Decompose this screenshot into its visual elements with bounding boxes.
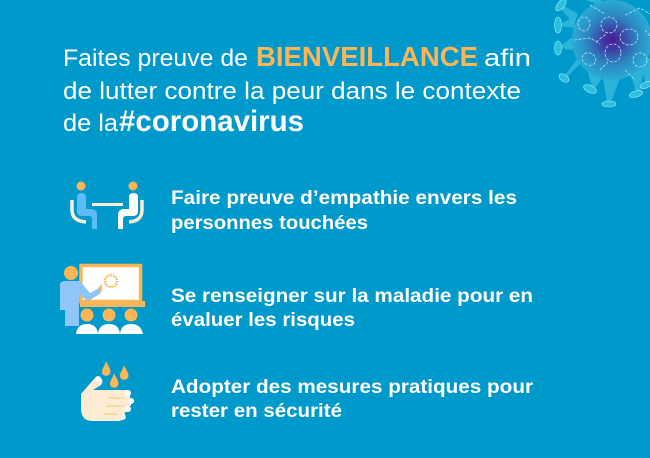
title [63, 41, 531, 138]
text: empathy: personnes touchées [171, 212, 368, 234]
text: empathy: Faire preuve d’empathie envers les [171, 187, 517, 209]
title line 2: de lutter contre la peur dans le contexte [63, 78, 521, 105]
title line 3: de la [63, 110, 118, 137]
title line 1: Faites preuve de [63, 45, 248, 72]
text: empathy [171, 187, 517, 234]
text: inform: Se renseigner sur la maladie pour en [171, 285, 533, 307]
highlight word: BIENVEILLANCE [256, 41, 478, 72]
icon: two people at table [72, 182, 142, 229]
icon: washing hands [81, 361, 134, 421]
illustration: coronavirus [554, 0, 650, 107]
text: practical measures: Adopter des mesures pratiques pour [171, 376, 533, 398]
text: inform [171, 285, 533, 331]
text: inform: évaluer les risques [171, 309, 355, 331]
text: practical measures [171, 376, 533, 422]
icon: presenter at board [60, 266, 145, 334]
title line 1 end: afin [484, 45, 531, 72]
hashtag: #coronavirus [119, 105, 304, 138]
text: practical measures: rester en sécurité [171, 400, 342, 422]
